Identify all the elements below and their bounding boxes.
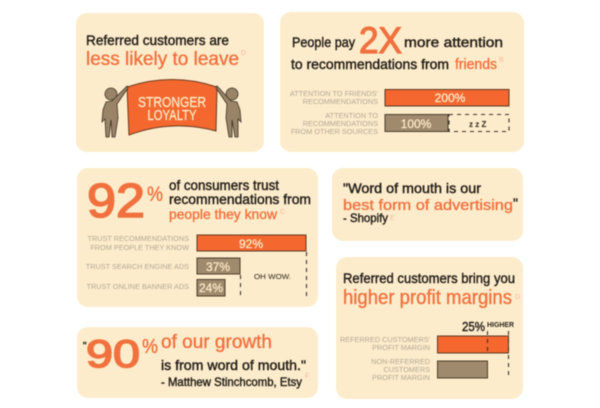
bar: 200%: 200% xyxy=(435,91,466,105)
banner: stronger loyalty xyxy=(127,80,217,135)
text: recommendations from: recommendations from xyxy=(169,191,311,207)
footnote B: B xyxy=(499,57,504,64)
stat: 92: 92 xyxy=(87,175,145,228)
text: shopify: - Shopify xyxy=(343,211,388,225)
bar: 100%: 100% xyxy=(401,117,432,131)
dashed remainder with zzz xyxy=(449,114,509,132)
annotation: higher: HIGHER xyxy=(487,322,514,329)
quote mark: " xyxy=(83,341,87,352)
footnote C: C xyxy=(280,209,285,216)
bar label: friends: ATTENTION TO FRIENDS' xyxy=(290,89,379,98)
bar label: non-referred: CUSTOMERS xyxy=(384,365,430,374)
bar label: other sources: RECOMMENDATIONS xyxy=(303,119,378,128)
heading: people pay: People pay xyxy=(292,34,355,50)
bar: 92%: 92% xyxy=(239,237,263,251)
bar: 37%: 37% xyxy=(206,260,230,274)
bar: 100% xyxy=(385,114,448,132)
stat: 90: 90 xyxy=(86,333,140,376)
panel: higher profit margins xyxy=(336,257,523,399)
panel: 92% trust xyxy=(77,168,318,307)
heading: to recommendations from: to recommendations from xyxy=(291,56,449,72)
text: of consumers trust: of consumers trust xyxy=(169,177,279,193)
bar: 92% xyxy=(197,235,306,251)
stat: 2X: 2X xyxy=(359,20,402,61)
text: best form of advertising: best form of advertising xyxy=(343,197,513,214)
bar label: friends: RECOMMENDATIONS xyxy=(303,97,378,106)
icon: right figure xyxy=(216,86,241,137)
text: of our growth: of our growth xyxy=(161,332,272,353)
stat: percent: % xyxy=(147,183,163,206)
panel: shopify quote xyxy=(332,168,523,241)
footnote E: E xyxy=(390,215,395,222)
banner: stronger loyalty: STRONGER xyxy=(138,94,206,111)
heading: higher profit margins: higher profit margins xyxy=(343,287,512,309)
heading: more attention: more attention xyxy=(404,34,503,50)
text: people they know: people they know xyxy=(169,206,278,222)
footnote D: D xyxy=(241,50,246,57)
text: attribution: - Matthew Stinchcomb, Etsy xyxy=(161,375,302,389)
banner: stronger loyalty: LOYALTY xyxy=(148,107,196,124)
bar label: banner ads: TRUST ONLINE BANNER ADS xyxy=(87,282,189,291)
footnote D: D xyxy=(515,294,520,301)
bar label: non-referred: PROFIT MARGIN xyxy=(372,373,430,382)
annotation: oh wow: OH WOW. xyxy=(254,272,291,281)
bar label: people they know: TRUST RECOMMENDATIONS xyxy=(88,234,189,243)
bar chart: trust xyxy=(86,234,306,297)
text: word of mouth is our: "Word of mouth is our xyxy=(343,180,481,196)
panel: 2X more attention xyxy=(280,12,524,152)
bar label: search ads: TRUST SEARCH ENGINE ADS xyxy=(86,262,189,271)
bar: referred xyxy=(438,336,508,353)
panel: 90% of our growth xyxy=(77,327,318,398)
bar label: referred: PROFIT MARGIN xyxy=(372,343,430,352)
bar label: other sources: FROM OTHER SOURCES xyxy=(291,127,378,136)
bar label: other sources: ATTENTION TO xyxy=(325,111,378,120)
bar: 37% xyxy=(197,258,240,274)
heading: referred customers bring you: Referred customers bring you xyxy=(343,270,515,286)
icon: left figure xyxy=(102,86,128,137)
footnote F: F xyxy=(305,373,309,380)
bar label: people they know: FROM PEOPLE THEY KNOW xyxy=(90,243,189,252)
text: is from word of mouth: is from word of mouth." xyxy=(161,357,306,373)
bar: non-referred xyxy=(438,361,488,378)
bar: 200% xyxy=(385,90,509,106)
annotation: 25%: 25% xyxy=(462,319,485,334)
closing quote: " xyxy=(513,195,518,211)
bar label: referred: REFERRED CUSTOMERS' xyxy=(340,335,431,344)
heading: referred customers: Referred customers are xyxy=(86,32,229,48)
heading: less likely to leave: less likely to leave xyxy=(86,49,239,70)
stat: percent: % xyxy=(142,336,158,358)
bar: 24%: 24% xyxy=(199,281,223,295)
bar chart: margin xyxy=(340,319,514,382)
bar chart: attention xyxy=(290,89,509,136)
dashed remainder with zzz: z z Z xyxy=(469,120,486,129)
panel: less likely to leave xyxy=(76,13,264,152)
heading: friends: friends xyxy=(455,56,497,73)
bar label: non-referred: NON-REFERRED xyxy=(371,357,430,366)
